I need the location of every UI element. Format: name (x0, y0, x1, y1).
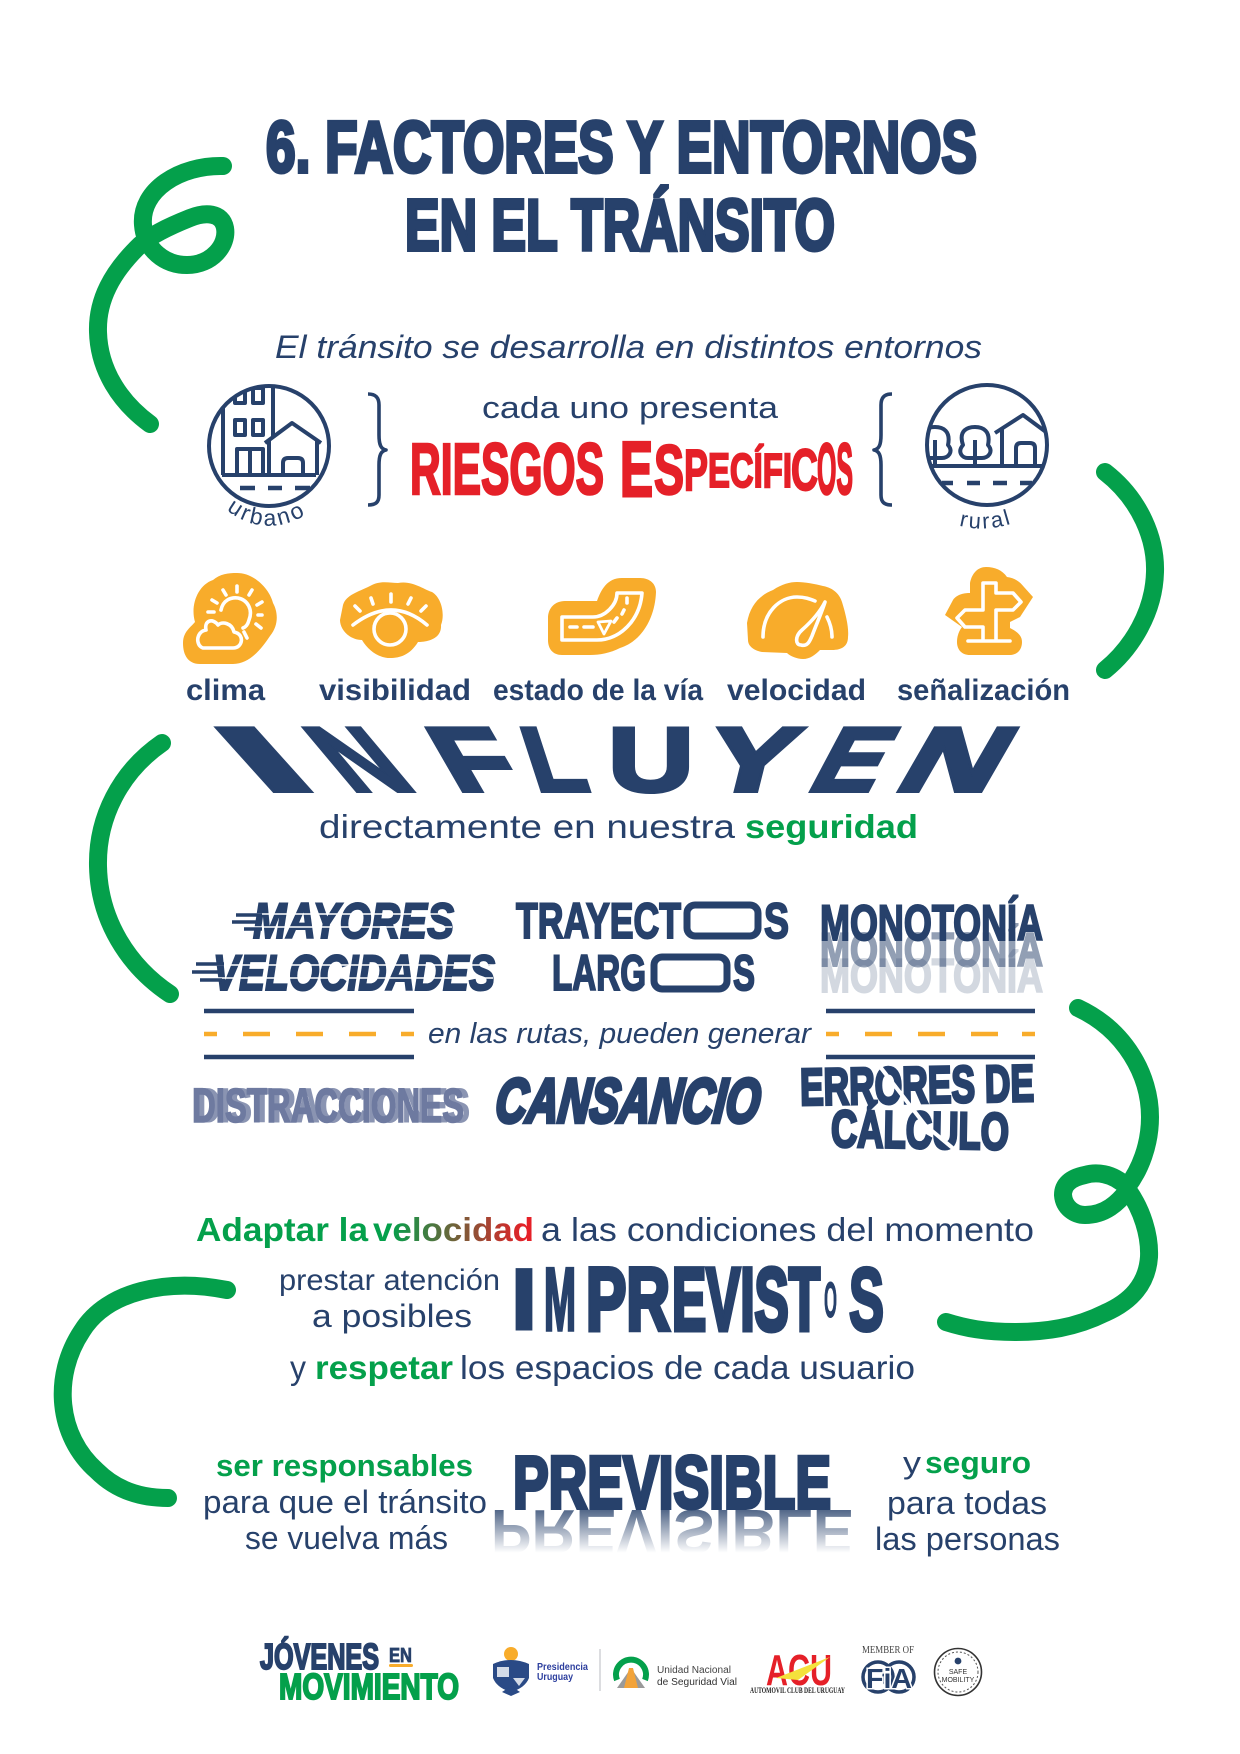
directamente en nuestra seguridad: seguridad (745, 808, 918, 845)
green squiggle: middle left (98, 743, 170, 994)
logo: presidencia uruguay: Presidencia (537, 1662, 588, 1673)
logo: automovil club del uruguay: AUTOMOVIL CLUB DEL URUGUAY (750, 1686, 845, 1695)
logo: jovenes en movimiento: JÓVENES (260, 1635, 379, 1677)
influyen heading: L (509, 708, 598, 810)
errores de calculo: ERRORES DE (800, 1055, 1035, 1117)
distracciones (192, 1080, 470, 1133)
adaptar la velocidad: velocidad (373, 1211, 534, 1248)
adaptar la velocidad: Adaptar la (196, 1211, 369, 1248)
green squiggle: right with loop (946, 1008, 1150, 1332)
adaptar la velocidad (196, 1211, 1034, 1248)
logo: jovenes en movimiento: MOVIMIENTO (279, 1666, 459, 1707)
distracciones: DISTRACCIONES (192, 1080, 464, 1133)
y seguro: para todas (887, 1485, 1047, 1521)
imprevistos: O (824, 1272, 837, 1328)
trayectos largos (516, 893, 789, 1001)
factor labels: clima (186, 674, 265, 707)
directamente en nuestra seguridad: directamente en nuestra (319, 808, 736, 845)
influyen heading (188, 708, 1037, 811)
logo: safe mobility (934, 1648, 982, 1696)
brace left (368, 394, 386, 505)
y respetar los espacios: respetar (315, 1349, 453, 1386)
y seguro: y (903, 1445, 922, 1480)
riesgos especificos: C (791, 438, 818, 503)
label: urbano: urbano (228, 500, 303, 526)
ser responsables: para que el tránsito (203, 1484, 487, 1520)
green squiggle: upper right (1105, 472, 1155, 670)
y respetar los espacios (290, 1349, 915, 1386)
logo: jovenes en movimiento (260, 1635, 459, 1707)
directamente en nuestra seguridad (319, 808, 918, 845)
icon: urbano (207, 384, 331, 526)
cansancio: CANSANCIO (493, 1067, 764, 1136)
influyen heading: N (879, 709, 1037, 810)
icon: visibilidad (340, 582, 443, 658)
riesgos especificos: S (654, 431, 684, 509)
icon: senalizacion (945, 567, 1033, 655)
y seguro (875, 1445, 1060, 1557)
previsible with reflection: PREVISIBLE (513, 1441, 831, 1524)
monotonia (820, 895, 1043, 1002)
icon: estado de la via (548, 578, 656, 655)
cada uno presenta: cada uno presenta (482, 390, 779, 425)
y seguro: seguro (925, 1445, 1031, 1480)
prestar atencion a posibles: a posibles (312, 1298, 472, 1334)
riesgos especificos (410, 425, 853, 513)
influyen heading: N (281, 708, 436, 810)
logo: unasev: Unidad Nacional (657, 1665, 731, 1676)
brace right (874, 394, 892, 505)
influyen heading: I (188, 709, 340, 811)
road right (826, 1011, 1035, 1057)
errores de calculo: CÁLCULO (830, 1100, 1009, 1162)
factor labels (186, 674, 1070, 707)
monotonia: MONOTONÍA (820, 923, 1043, 976)
mayores velocidades: MAYORES (253, 893, 454, 949)
en las rutas, pueden generar: en las rutas, pueden generar (428, 1018, 812, 1050)
factor labels: visibilidad (319, 674, 471, 707)
influyen heading: Y (697, 709, 810, 811)
road left (204, 1011, 414, 1057)
imprevistos: S (849, 1249, 884, 1349)
factor labels: señalización (897, 674, 1070, 707)
title: EN EL TRÁNSITO (405, 186, 835, 266)
logo: fia: FiA (866, 1663, 912, 1694)
y respetar los espacios: y (290, 1349, 306, 1386)
icon: velocidad (747, 582, 848, 659)
icon: clima (183, 573, 277, 664)
logo: unasev: de Seguridad Vial (657, 1677, 737, 1688)
monotonia: MONOTONÍA (820, 949, 1043, 1002)
ser responsables: ser responsables (216, 1448, 473, 1483)
imprevistos: M (544, 1249, 576, 1349)
logo: automovil club del uruguay: ACU (766, 1646, 832, 1695)
imprevistos (509, 1249, 884, 1349)
y seguro: las personas (875, 1521, 1060, 1557)
ser responsables: se vuelva más (245, 1520, 448, 1556)
divider (599, 1649, 601, 1691)
mayores velocidades (192, 893, 497, 1001)
icon: rural (925, 383, 1049, 529)
imprevistos: PR (586, 1249, 670, 1349)
previsible with reflection (491, 1441, 853, 1566)
imprevistos: EVIST (672, 1249, 820, 1349)
riesgos especificos: E (620, 425, 653, 513)
factor labels: velocidad (727, 674, 866, 707)
influyen heading: F (408, 709, 539, 811)
imprevistos: I (509, 1249, 539, 1349)
logo: unasev (616, 1660, 737, 1688)
logo: presidencia uruguay (493, 1647, 588, 1696)
riesgos especificos: P (684, 438, 708, 503)
logo: safe mobility: SAFE (949, 1669, 967, 1676)
trayectos largos: TRAYECT (516, 893, 681, 949)
y respetar los espacios: los espacios de cada usuario (460, 1349, 915, 1386)
logo: fia (862, 1645, 914, 1694)
prestar atencion a posibles (279, 1264, 500, 1334)
adaptar la velocidad: a las condiciones del momento (541, 1211, 1034, 1248)
text: OS (817, 430, 853, 510)
title (266, 108, 977, 266)
ser responsables (203, 1448, 487, 1556)
logo: fia: MEMBER OF (862, 1645, 914, 1656)
trayectos largos: S (733, 945, 755, 1001)
trayectos largos: LARG (552, 945, 646, 1001)
trayectos largos: S (764, 893, 789, 949)
logo: presidencia uruguay: Uruguay (537, 1672, 573, 1683)
influyen heading: U (608, 709, 694, 811)
title: 6. FACTORES Y ENTORNOS (266, 108, 977, 188)
intro sentence: El tránsito se desarrolla en distintos entornos (275, 329, 982, 365)
green squiggle: bottom left (63, 1286, 227, 1498)
distracciones: DISTRACCIONES (197, 1080, 470, 1133)
riesgos especificos: RIESGOS (410, 430, 604, 510)
monotonia: MONOTONÍA (820, 895, 1043, 951)
green squiggle: top left (98, 166, 225, 424)
riesgos especificos: ECÍFI (708, 444, 792, 498)
factor labels: estado de la vía (493, 674, 703, 707)
previsible with reflection: PREVISIBLE (491, 1497, 853, 1566)
prestar atencion a posibles: prestar atención (279, 1264, 500, 1297)
errores de calculo (800, 1055, 1035, 1162)
logo: safe mobility: MOBILITY (942, 1677, 975, 1684)
label: rural: rural (960, 509, 1010, 529)
mayores velocidades: VELOCIDADES (213, 945, 495, 1001)
influyen heading: E (794, 709, 915, 811)
logo: jovenes en movimiento: EN (389, 1645, 412, 1667)
